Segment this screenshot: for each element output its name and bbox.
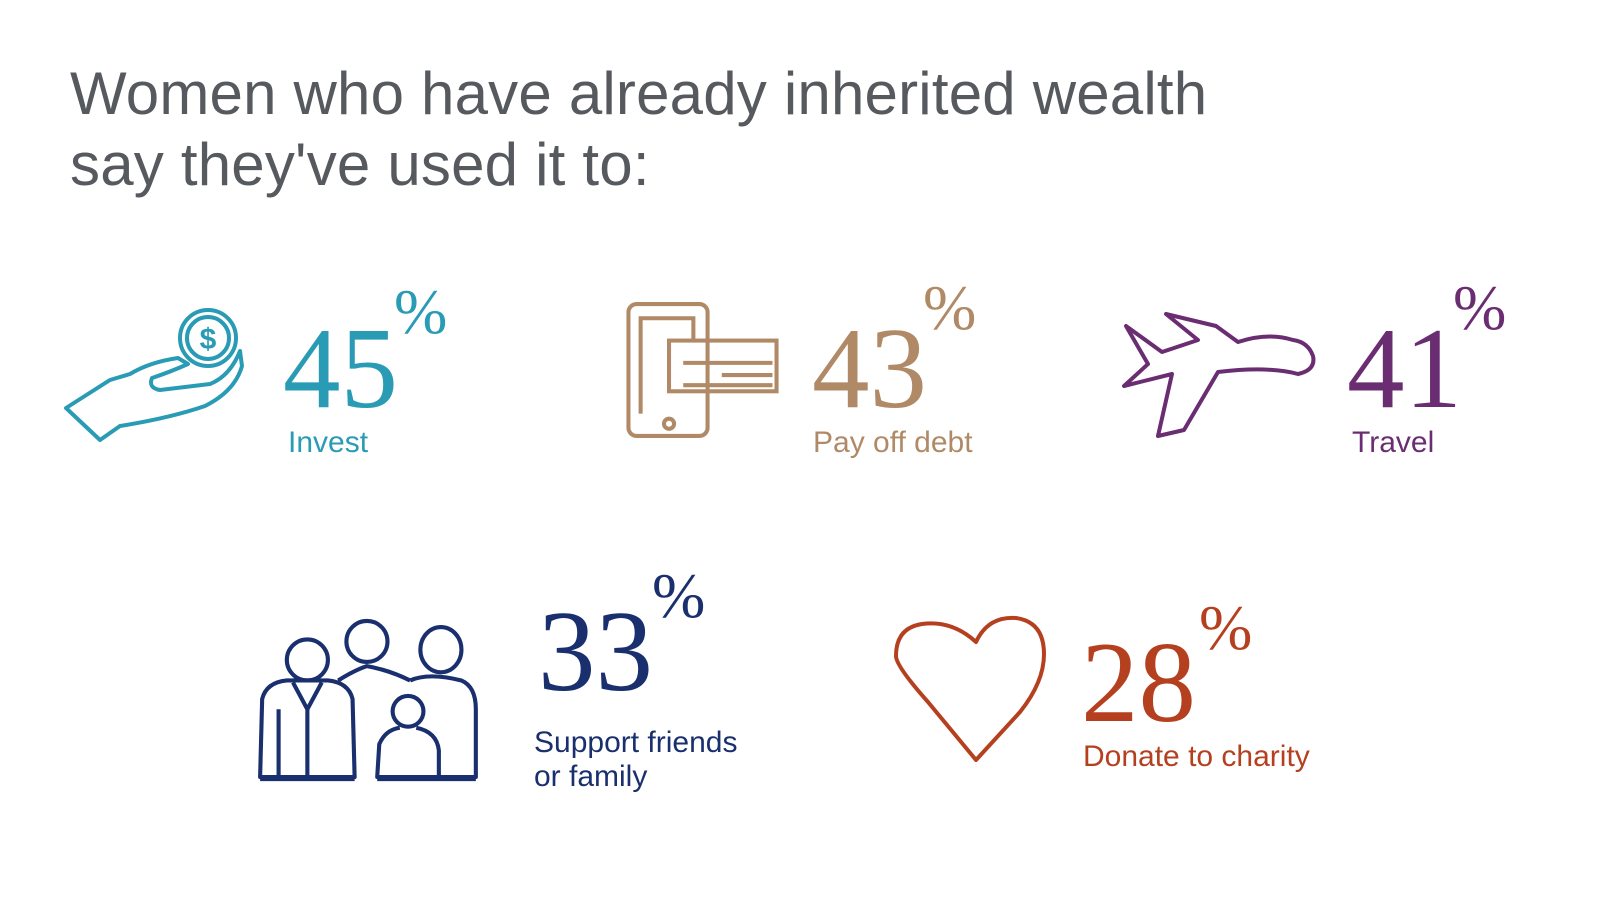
icon: airplane [1122,312,1316,438]
stat: support friends or family [258,560,737,793]
stat: support friends or family: % [652,560,705,631]
label: Invest [288,426,368,459]
icon: family [258,618,478,782]
icon: phone with card [626,302,779,438]
stat: travel: % [1453,272,1506,343]
icon: hand with coin: $ [200,323,217,356]
number 45%: 45 [283,305,398,432]
label: Donate to charity [1083,740,1310,773]
number 28%: 28 [1081,619,1196,746]
title [70,60,1207,198]
number 43%: 43 [812,305,927,432]
title: say they've used it to: [70,131,650,198]
stat: pay off debt: % [923,272,976,343]
icon: hand with coin [64,308,244,442]
number 33%: 33 [538,588,653,715]
title: Women who have already inherited wealth [70,60,1207,127]
label [534,726,737,793]
stat: donate to charity: % [1199,592,1252,663]
stat: invest [64,276,447,459]
stat: invest: % [394,276,447,347]
label: or family [534,760,647,793]
stat: donate to charity [894,592,1310,773]
label: Pay off debt [813,426,973,459]
label: Support friends [534,726,737,759]
icon: heart [894,616,1046,762]
stat: travel [1122,272,1506,459]
stat: pay off debt [626,272,976,459]
label: Travel [1352,426,1434,459]
number 41%: 41 [1347,305,1462,432]
